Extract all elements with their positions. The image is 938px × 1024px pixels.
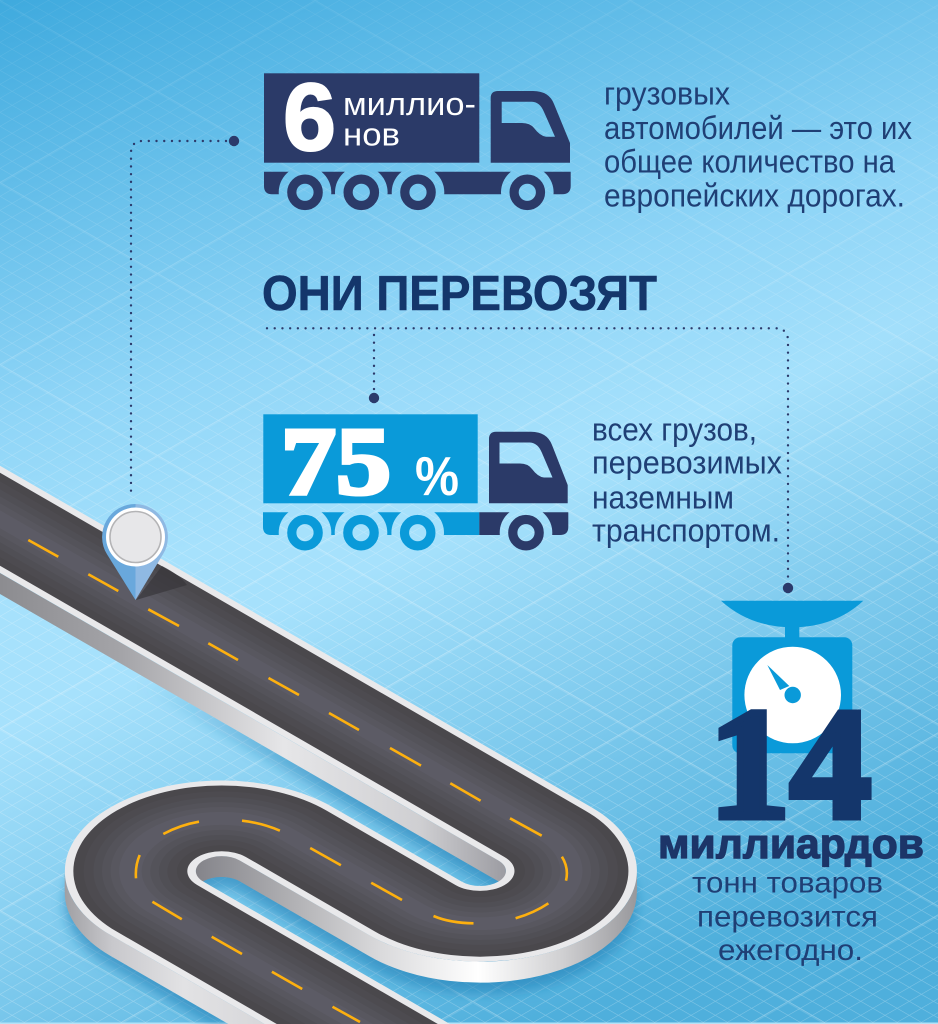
connector end dot: first truck (229, 136, 239, 146)
road side wall: upper stretch (0, 573, 506, 892)
connector end dot: scales (783, 583, 793, 593)
icon: weighing scales (721, 601, 863, 753)
text block: trucks on European roads: общее количество на (604, 144, 895, 180)
road side wall: right loop (196, 856, 637, 983)
text block: trucks on European roads (604, 75, 912, 214)
text block: share of land freight: перевозимых (592, 444, 782, 480)
truck wheels (292, 179, 540, 206)
truck cargo box (264, 73, 479, 163)
connector end dot: second truck (369, 393, 379, 403)
truck: 75 percent (263, 408, 568, 546)
truck chassis (263, 512, 568, 535)
text block: tonnes per year: ежегодно. (718, 934, 863, 967)
text block: share of land freight: всех грузов, (592, 412, 757, 448)
truck cab (491, 91, 570, 163)
number 6: 6 (283, 64, 336, 171)
truck wheels (292, 520, 539, 546)
road side wall: left loop (65, 871, 265, 1024)
icon: map pin (102, 504, 187, 600)
label: миллиардов: миллиардов (658, 820, 924, 867)
number 14: 14 (709, 677, 871, 852)
dotted connector: heading to second truck (373, 335, 375, 392)
dotted connector: pin to first truck (131, 141, 226, 496)
truck: 6 million (264, 64, 571, 206)
number 75: 75 (281, 408, 391, 514)
text block: share of land freight: транспортом. (592, 513, 780, 549)
pin shadow (136, 566, 187, 600)
label: миллио-: миллио- (343, 86, 476, 122)
text block: share of land freight: наземным (592, 480, 734, 516)
truck cab (489, 432, 568, 503)
heading: ОНИ ПЕРЕВОЗЯТ (262, 267, 657, 321)
road centre dashes (28, 540, 567, 1022)
text block: trucks on European roads: грузовых (604, 75, 730, 111)
percent sign: % (415, 445, 459, 507)
text block: tonnes per year: перевозится (697, 901, 878, 934)
truck cargo box (263, 414, 478, 503)
road shadow (0, 498, 637, 1024)
truck chassis (264, 172, 571, 194)
road surface (0, 466, 637, 1024)
winding road (0, 466, 637, 1024)
text block: tonnes per year (692, 867, 883, 967)
dotted connector: heading to scales (267, 328, 788, 582)
text block: tonnes per year: тонн товаров (692, 867, 883, 900)
text block: share of land freight (592, 412, 782, 549)
text block: trucks on European roads: европейских дорогах. (604, 178, 905, 214)
text block: trucks on European roads: автомобилей — это их (604, 110, 912, 146)
label: нов: нов (343, 117, 400, 153)
